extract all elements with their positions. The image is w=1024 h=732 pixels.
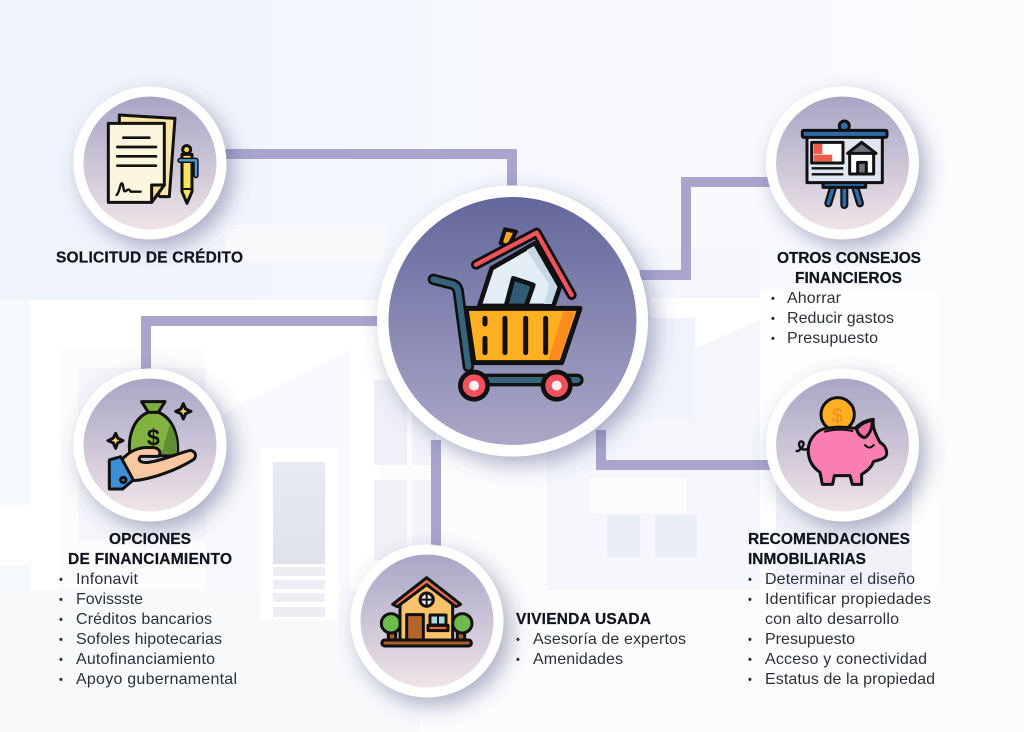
text block: vivienda usada: VIVIENDA USADA — [516, 611, 651, 628]
text block: vivienda usada — [516, 611, 686, 668]
text block: recomendaciones inmobiliarias: INMOBILIARIAS — [748, 551, 866, 568]
node: otros consejos financieros — [766, 86, 919, 240]
text block: opciones de financiamiento: • — [59, 634, 63, 646]
text block: otros consejos financieros: Presupuesto — [787, 330, 878, 347]
text block: otros consejos financieros: • — [771, 333, 775, 345]
text block: recomendaciones inmobiliarias: Identificar propiedades — [765, 591, 931, 608]
icon: hand holding money bag — [108, 402, 196, 489]
text block: recomendaciones inmobiliarias: • — [748, 654, 752, 666]
icon: piggy bank with coin: $ — [832, 405, 843, 427]
text block: opciones de financiamiento: Créditos bancarios — [76, 611, 212, 628]
heading: solicitud de crédito: SOLICITUD DE CRÉDITO — [56, 250, 243, 266]
text block: opciones de financiamiento: Fovissste — [76, 591, 143, 608]
text block: opciones de financiamiento — [59, 531, 237, 688]
text block: recomendaciones inmobiliarias: Estatus de la propiedad — [765, 671, 935, 688]
text block: vivienda usada: • — [516, 634, 520, 646]
text block: opciones de financiamiento: • — [59, 654, 63, 666]
text block: opciones de financiamiento: • — [59, 594, 63, 606]
text block: recomendaciones inmobiliarias: • — [748, 634, 752, 646]
text block: opciones de financiamiento: Autofinanciamiento — [76, 651, 215, 668]
text block: recomendaciones inmobiliarias: Determinar el diseño — [765, 571, 915, 588]
text block: opciones de financiamiento: Apoyo gubernamental — [76, 671, 237, 688]
text block: opciones de financiamiento: Infonavit — [76, 571, 139, 588]
text block: opciones de financiamiento: DE FINANCIAMIENTO — [68, 551, 232, 568]
text block: opciones de financiamiento: Sofoles hipotecarias — [76, 631, 222, 648]
text block: recomendaciones inmobiliarias: RECOMENDACIONES — [748, 531, 910, 548]
icon: document and pen — [108, 115, 196, 203]
text block: otros consejos financieros: FINANCIEROS — [795, 270, 902, 287]
connector: solicitud de crédito — [225, 154, 512, 195]
node: vivienda usada — [350, 544, 504, 698]
text block: recomendaciones inmobiliarias: • — [748, 674, 752, 686]
connector: vivienda usada — [431, 440, 441, 550]
text block: otros consejos financieros: Ahorrar — [787, 290, 842, 307]
text block: opciones de financiamiento: • — [59, 674, 63, 686]
node: recomendaciones inmobiliarias — [766, 368, 919, 522]
text block: opciones de financiamiento: • — [59, 614, 63, 626]
text block: vivienda usada: Asesoría de expertos — [533, 631, 686, 648]
text block: recomendaciones inmobiliarias: Presupuesto — [765, 631, 855, 648]
connector: opciones de financiamiento — [146, 321, 385, 375]
text block: recomendaciones inmobiliarias: • — [748, 594, 752, 606]
node: solicitud de crédito — [74, 86, 226, 240]
text block: recomendaciones inmobiliarias: • — [748, 574, 752, 586]
connector: otros consejos — [640, 182, 775, 275]
icon: presentation board with house — [802, 121, 887, 205]
text block: vivienda usada: Amenidades — [533, 651, 623, 668]
icon: piggy bank with coin — [797, 398, 887, 484]
icon: hand holding money bag: $ — [147, 425, 160, 451]
icon: house with trees — [381, 578, 472, 646]
text block: opciones de financiamiento: • — [59, 574, 63, 586]
text block: recomendaciones inmobiliarias: Acceso y conectividad — [765, 651, 927, 668]
text block: recomendaciones inmobiliarias: con alto desarrollo — [765, 611, 899, 628]
node: opciones de financiamiento — [74, 368, 226, 522]
node: central cart — [377, 186, 648, 456]
text block: otros consejos financieros: Reducir gastos — [787, 310, 894, 327]
text block: otros consejos financieros: • — [771, 313, 775, 325]
text block: otros consejos financieros: OTROS CONSEJOS — [777, 250, 921, 267]
text block: recomendaciones inmobiliarias — [748, 531, 935, 688]
text block: otros consejos financieros — [771, 250, 921, 347]
text block: vivienda usada: • — [516, 654, 520, 666]
text block: opciones de financiamiento: OPCIONES — [109, 531, 191, 548]
text block: otros consejos financieros: • — [771, 293, 775, 305]
icon: shopping cart with house — [433, 229, 580, 402]
connector: recomendaciones inmobiliarias — [601, 430, 775, 465]
